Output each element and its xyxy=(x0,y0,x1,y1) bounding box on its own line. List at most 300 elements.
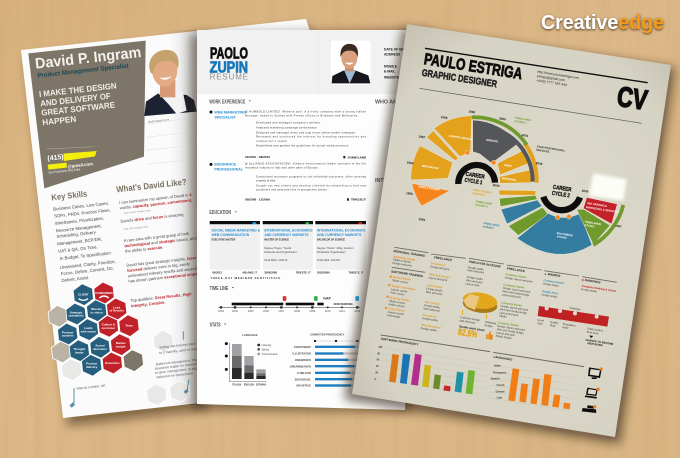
callout labels: PRINT DESIGN xyxy=(473,188,492,195)
closing note with arrow: Rank number xyxy=(587,326,604,333)
donut chart: career cycle 1: BRANDING xyxy=(502,176,517,182)
bar chart: languages: LANGUAGES xyxy=(493,355,513,362)
contact details with yellow highlights: @gmail.com xyxy=(67,161,93,169)
hexagon skills chart: leader xyxy=(75,350,85,354)
column: freelance: Company Studio xyxy=(503,282,525,290)
name heading: David P. Ingram xyxy=(34,44,142,73)
location note, bottom left xyxy=(69,383,107,408)
bar chart: software proficiency: 60 xyxy=(377,360,380,362)
donut chart: career cycle 2: CYCLE 2 xyxy=(551,191,570,199)
portrait photo xyxy=(331,41,371,85)
bar chart: languages: Portuguese xyxy=(493,371,507,374)
quote snippets, upper: Jane Doe, Design Lead xyxy=(123,226,148,231)
bar chart: languages: Spanish xyxy=(491,378,500,380)
hexagon skills chart: Product xyxy=(86,362,97,366)
job entry: insurance professional: @ ALLIANCE ASSICURAZIONI. Alliance Assicurazioni leader operates in the life xyxy=(245,162,367,166)
hexagon skills chart: customer xyxy=(102,326,116,330)
notes, bottom right: Balanced management, PM xyxy=(156,358,197,366)
personal details: WEBSITE xyxy=(384,76,400,80)
job entry: web marketing specialist: Analyzed marketing campaign performance. xyxy=(256,125,318,129)
pie chart captions: Studio work share xyxy=(459,324,485,332)
quote snippets, lower: A rare area with a great grasp of both xyxy=(124,231,189,243)
timeline year labels xyxy=(406,109,622,229)
column: software training: Design Techniques xyxy=(392,284,417,291)
donut chart: career cycle 1: CAREER xyxy=(465,172,485,181)
education column bodies: 2006/2008 xyxy=(264,271,277,275)
stacked bar chart: language: Communication xyxy=(262,353,279,356)
heading: work experience: WORK EXPERIENCE xyxy=(209,99,246,105)
grey header band xyxy=(197,30,430,94)
job entry: web marketing specialist: WEB MARKETING xyxy=(214,111,246,115)
callout labels: FREELANCE xyxy=(476,199,493,206)
job entry: web marketing specialist: Developed and managed company's website. xyxy=(256,120,321,124)
column: freelance: Studio design xyxy=(496,334,513,340)
timeline year labels: 1999 xyxy=(468,109,476,114)
donut chart: career cycle 1: CYCLE 1 xyxy=(464,178,483,186)
bar chart: software proficiency: 0 xyxy=(375,379,377,381)
education column bodies: TRIESTE, IT xyxy=(296,271,311,275)
red ribbon timeline: Quality xyxy=(550,320,559,325)
timeline year labels: 2000 xyxy=(499,116,506,121)
pie chart xyxy=(462,290,498,315)
quote snippets, lower: David has great strategic insights, laser xyxy=(126,255,197,268)
column: freelance studio list: Illustration xyxy=(423,313,437,319)
education column bodies: AND CURRENCY MARKETS xyxy=(264,233,309,237)
horizontal bar chart: computer proficiency xyxy=(290,333,358,388)
column: employee in-house: Design studio xyxy=(468,265,485,272)
contact details with yellow highlights xyxy=(47,147,97,175)
timeline chart: GAP xyxy=(323,297,331,301)
education column bodies: Degree Thesis: "eBay, Amazon xyxy=(317,246,354,250)
notes, bottom right: Selling into Internet sites xyxy=(159,342,196,350)
column: freelance: Web and media design xyxy=(497,327,524,335)
column: awards: Design Prize xyxy=(542,289,559,296)
job entry: web marketing specialist: competitor's reach. xyxy=(256,139,288,143)
hexagon skills chart: with vision xyxy=(80,329,96,333)
bar chart: software proficiency: SOFTWARE PROFICIENCY xyxy=(381,337,419,346)
column: software training: SOFTWARE TRAINING xyxy=(391,269,424,278)
job entry: web marketing specialist xyxy=(209,109,367,159)
column: freelance: Design, layout and print xyxy=(505,275,533,284)
key skills list, lower: UAT & QA, On Time, xyxy=(58,244,98,254)
personal details: ADDRESS xyxy=(384,53,401,57)
notes, bottom right: balanced on assessment xyxy=(156,371,193,379)
profile lines next to the photo: david.ingram.com xyxy=(148,117,170,124)
education column bodies: MASTER OF SCIENCE xyxy=(264,238,289,241)
quote snippets, upper: words: capacity, passion, commitment, xyxy=(120,197,192,210)
horizontal bar chart: computer proficiency: PHOTOSHOP xyxy=(294,345,311,349)
icon: tablet device xyxy=(582,405,596,413)
stacked bar chart: language: GERMAN xyxy=(256,384,266,387)
notes, bottom right xyxy=(155,331,203,394)
column: awards: Design studio xyxy=(543,281,560,288)
timeline chart: NOW WORKING xyxy=(334,302,353,306)
column: personal training: Design and print xyxy=(392,261,412,268)
column: freelance: Design, layout and print xyxy=(500,304,529,312)
red ribbon timeline: Reputation xyxy=(563,322,576,328)
column: freelance: Company Studio xyxy=(505,272,527,279)
donut chart: career cycle 2 xyxy=(499,185,623,254)
job title: GRAPHIC DESIGNER xyxy=(421,68,498,90)
timeline chart: 2004 xyxy=(232,309,238,313)
job entry: web marketing specialist: @ HUMBOLD LIMITED. Website.split is a lively company with a strong Italian xyxy=(245,109,367,113)
bar chart: software proficiency xyxy=(375,335,490,395)
stacked bar chart: language: ITALIAN xyxy=(232,384,241,387)
name heading xyxy=(210,45,248,81)
timeline year labels: 2001 xyxy=(522,133,529,138)
column: freelance xyxy=(496,266,533,340)
panel: middle resume Paolo Zupin xyxy=(190,30,430,412)
donut chart: career cycle 2: FREELANCE xyxy=(585,220,602,226)
personal details: MOBILE xyxy=(384,64,398,68)
horizontal bar chart: computer proficiency: DREAMWEAVER xyxy=(290,364,311,368)
column: freelance: Studio xyxy=(499,314,507,319)
column: freelance: Web and media design xyxy=(500,307,528,315)
stacked bar chart: language xyxy=(225,333,279,387)
job entry: insurance professional: INSURANCE xyxy=(214,163,237,167)
timeline year labels: 2007 xyxy=(615,224,622,229)
column: freelance: FREELANCE xyxy=(507,266,525,273)
column: software training: Color Theory xyxy=(388,306,406,313)
icon: laptop xyxy=(585,388,600,399)
column: freelance studio list: Design studio xyxy=(424,303,441,310)
glossy paper glare xyxy=(589,173,627,201)
bar chart: software proficiency: 20 xyxy=(375,373,379,375)
key skills list, lower xyxy=(56,230,116,283)
horizontal bar chart: computer proficiency: MS OFFICE xyxy=(297,384,311,388)
column: employee in-house: EMPLOYEE IN-HOUSE xyxy=(469,260,501,269)
heading: who am I: WHO AM I xyxy=(375,99,401,105)
contact details with yellow highlights: San Francisco Bay Area xyxy=(48,167,81,175)
donut chart: career cycle 1: MOBILE DESIGN xyxy=(418,184,440,192)
job entry: insurance professional: 09/2008 - 12/2009 xyxy=(245,197,270,201)
column: software training: Print studio xyxy=(387,313,401,319)
column: freelance studio list: Design studio xyxy=(426,286,443,293)
education column bodies: Worldwide Organization" xyxy=(317,250,346,254)
closing note with arrow: CHANCE TO BECOME xyxy=(585,338,614,346)
column: freelance studio list: Web and print xyxy=(423,306,440,313)
column: rankings: Design studio xyxy=(581,287,598,294)
faint background hexagons xyxy=(61,329,191,407)
personal details: E-MAIL xyxy=(384,70,395,74)
key skills list, upper: SOPs, PRDs, Process Flows, xyxy=(54,207,111,219)
donut chart: career cycle 2: BIG GRAPHICS xyxy=(587,201,607,208)
pie chart captions xyxy=(459,310,497,332)
timeline chart: 2006 xyxy=(263,309,269,313)
timeline year labels: 1998 xyxy=(441,115,448,120)
column: freelance studio list: Company A xyxy=(431,261,446,267)
hexagon skills chart: decisions xyxy=(93,347,107,351)
column: freelance studio list: Layout and print xyxy=(428,275,448,282)
hexagon skills chart: of Results xyxy=(109,309,124,313)
portrait photo xyxy=(144,50,197,116)
timeline chart: 2007 xyxy=(278,309,285,313)
statement: AND DELIVERY OF xyxy=(40,91,111,108)
callout labels: STAR PROFESSIONAL xyxy=(537,144,566,153)
bar chart: software proficiency: 80 xyxy=(377,354,381,356)
hexagon skills chart: CONSUMER xyxy=(95,291,114,295)
donut chart: career cycle 2: MARKETING & SERVICES xyxy=(586,205,619,214)
callout labels: SERVICES xyxy=(536,148,550,154)
education column bodies: WEB COMMUNICATION xyxy=(212,233,250,237)
column: freelance studio list: Design studio xyxy=(421,326,438,333)
hexagon skills chart: Culture & xyxy=(102,323,116,327)
contact text xyxy=(536,70,579,87)
column: awards: Company Award xyxy=(543,278,565,285)
location note, bottom left: Start at London, UK xyxy=(76,383,107,391)
horizontal bar chart: computer proficiency: HTML/CSS xyxy=(297,371,311,375)
heading: what's David like: What's David Like? xyxy=(116,177,187,194)
personal details xyxy=(384,47,410,80)
donut chart: career cycle 1: GRAPHIC DESIGN xyxy=(449,134,472,141)
column: software training: Studio course xyxy=(389,299,406,305)
timeline year labels: 1995 xyxy=(406,191,413,196)
callout labels xyxy=(472,116,566,230)
stacked bar chart: language: ENGLISH xyxy=(244,385,254,387)
column: personal training: Studio in Berlin xyxy=(393,257,412,264)
column: freelance studio list: Print Design xyxy=(427,283,443,289)
hexagon skills chart: Product xyxy=(62,330,73,334)
column: freelance studio list: Web Design xyxy=(425,300,440,306)
timeline chart: 2010 xyxy=(325,309,331,313)
pie chart captions: design xyxy=(485,323,493,328)
quote snippets, upper xyxy=(119,192,193,231)
key skills list, lower: Deliver, Assist xyxy=(61,275,89,283)
column: rankings xyxy=(581,278,617,294)
column: freelance studio list: Design and print xyxy=(430,264,450,271)
donut chart: career cycle 2: STUDIO xyxy=(584,223,595,229)
donut chart: career cycle 1: WEB DESIGN xyxy=(422,164,439,170)
callout labels: FREELANCE xyxy=(515,116,532,122)
hexagon skills chart: Execution xyxy=(105,361,120,365)
column: software training: Drawing Design xyxy=(390,295,410,302)
quote snippets, lower: Integrity, Creative. xyxy=(131,300,166,308)
education column bodies: INTERNATIONAL ECONOMICS xyxy=(317,228,366,232)
column: software training: Print course xyxy=(390,290,405,297)
hexagon skills chart: Sound xyxy=(95,344,105,348)
statement: GREAT SOFTWARE xyxy=(41,100,116,118)
job entry: insurance professional xyxy=(209,162,367,202)
key skills list, lower: In Budget, To Specification xyxy=(60,250,112,261)
donut chart: career cycle 2: MULTIMEDIA xyxy=(557,231,573,238)
bar chart: languages: French xyxy=(497,385,505,387)
education column bodies: SOCIAL MEDIA MARKETING & xyxy=(212,228,261,232)
quote snippets, upper: John Smith, Product Lead xyxy=(124,209,151,215)
logo: Creativeedge: Creativeedge xyxy=(541,11,664,34)
stacked bar chart: language: LANGUAGE xyxy=(242,333,258,337)
column: freelance studio list: Design studio xyxy=(422,316,439,323)
column: awards xyxy=(541,272,565,299)
name heading: ZUPIN xyxy=(210,59,248,76)
hexagon skills chart: insight xyxy=(116,344,126,348)
icon: desktop monitor xyxy=(588,367,603,379)
red ribbon timeline: Start xyxy=(537,321,543,326)
quote snippets, upper: David's drive and focus is amazing xyxy=(120,212,184,224)
column: freelance: Design, layout and print xyxy=(503,286,531,294)
column: freelance studio list: Web Site Design xyxy=(429,272,450,279)
notes, bottom right: to 2 majority, used to manage xyxy=(159,346,203,355)
education column bodies: MILANO, IT xyxy=(243,271,257,275)
education column bodies xyxy=(210,224,366,280)
column: personal training xyxy=(392,249,426,268)
contact text: http://www.pauloestriga.com xyxy=(537,70,579,80)
panel: right resume Paulo Estriga xyxy=(344,24,675,444)
column: freelance studio list: Web and print xyxy=(426,290,443,296)
bar chart: languages xyxy=(488,352,584,411)
column: awards: AWARDS xyxy=(547,272,561,278)
hexagon skills chart: Leads xyxy=(84,326,93,330)
header rules xyxy=(419,48,648,123)
quote snippets, lower: technological and strategic issues, and xyxy=(124,235,197,248)
bar chart: languages: Latin xyxy=(497,397,503,400)
column: freelance: Web and media design xyxy=(502,289,530,297)
education column bodies: Degree Thesis: "Social xyxy=(264,246,292,250)
column: employee in-house: Layout work xyxy=(465,281,481,288)
donut chart: career cycle 1: WEBSITE xyxy=(486,138,499,144)
column: freelance: Company Studio xyxy=(498,320,519,328)
column: personal training: Marketing Design xyxy=(393,254,416,262)
column: freelance: Company Studio xyxy=(501,300,523,308)
column: freelance: Layout and print xyxy=(496,330,516,337)
timeline chart: 2008 xyxy=(294,309,300,313)
heading: time line: TIME LINE xyxy=(210,286,229,292)
column: software training: Layout course xyxy=(391,287,408,294)
timeline year labels: 2008 xyxy=(582,189,589,194)
bar chart: languages: Italian xyxy=(494,365,501,368)
closing note with arrow: Best work xyxy=(587,330,599,336)
key skills list, upper xyxy=(53,201,111,233)
name heading: RESUME xyxy=(210,72,248,81)
icon: thumbs up xyxy=(486,331,493,340)
pie chart captions: Individual xyxy=(485,320,497,325)
hexagon skills chart: Mission xyxy=(91,307,102,311)
donut chart: career cycle 2: STUDIO xyxy=(557,234,567,240)
hexagon skills chart: systems xyxy=(62,334,74,338)
quote snippets, lower: the ability to execute. xyxy=(125,244,164,254)
timeline chart xyxy=(218,296,361,313)
heading: stats: STATS xyxy=(210,323,221,329)
job entry: web marketing specialist: Heritage, based in Sydney with French offices in Brisbane and Melbourne. xyxy=(245,114,359,118)
education column bodies: Networks and Organization" xyxy=(264,250,297,254)
key skills list, lower: Management, BCP/DR, xyxy=(57,236,102,246)
contact text: +44(0) 7777 555 444 xyxy=(536,78,567,87)
column: software training: Adobe Design xyxy=(393,275,411,281)
donut chart: career cycle 1 xyxy=(411,116,537,206)
callout labels: AGENCY xyxy=(483,224,495,230)
job entry: web marketing specialist: Designed and managed direct and long terms online market strategies. xyxy=(256,130,356,134)
column: awards: Design studio xyxy=(541,292,558,299)
olive header block xyxy=(28,41,146,188)
job entry: insurance professional: PROFESSIONAL xyxy=(214,167,244,171)
job entry: web marketing specialist: SPECIALIST xyxy=(214,115,237,119)
timeline year labels: 1994 xyxy=(418,217,426,222)
timeline chart: 2011 xyxy=(339,309,345,313)
CV mark: CV xyxy=(615,81,650,116)
panel: left resume David P. Ingram xyxy=(21,19,310,426)
hexagon skills chart: operations xyxy=(68,314,84,318)
job entry: insurance professional: Sought out new clients and develop clientele by networking to find new xyxy=(256,183,366,187)
hexagon skills chart xyxy=(48,281,144,377)
donut chart: career cycle 2: CAREER xyxy=(552,185,572,193)
hexagon skills chart: CLIENT xyxy=(78,293,89,297)
timeline year labels: 1996 xyxy=(407,160,414,165)
timeline chart: 2005 xyxy=(248,309,254,313)
education column bodies: BACHELOR OF SCIENCE xyxy=(317,238,346,241)
red ribbon timeline xyxy=(537,306,609,330)
education column bodies: EXECUTIVE MASTER xyxy=(212,238,236,241)
education column bodies: 2003/2006 xyxy=(317,271,330,275)
timeline year labels: 1997 xyxy=(418,134,426,139)
job entry: web marketing specialist: 01/2010 - 08/2012 xyxy=(245,155,270,159)
closing note with arrow: NEW WORK xyxy=(587,341,603,347)
name heading: PAOLO xyxy=(210,45,248,62)
column: employee in-house: Design studio xyxy=(467,275,484,281)
callout labels: FREELANCE xyxy=(483,221,500,228)
key skills list, lower: Unassisted, Clarity, Prioritize, xyxy=(60,259,116,270)
job entry: web marketing specialist: Established and applied the guidelines for social media presence. xyxy=(256,144,350,148)
red ribbon timeline: Good xyxy=(537,318,545,323)
heading: key skills: Key Skills xyxy=(51,188,88,202)
job entry: insurance professional: a variety of risks. xyxy=(256,179,276,183)
callout labels: COMPANY xyxy=(472,191,486,197)
statement xyxy=(38,80,117,127)
job entry: insurance professional: Customized insurance programs to suit individual customers, often covering xyxy=(256,174,367,178)
bar chart: software proficiency: 100 xyxy=(378,347,383,349)
hexagon skills chart: delivery xyxy=(86,365,98,369)
key skills list, lower: Scheduling, Delivery xyxy=(56,230,97,239)
quote snippets, upper: I can summarize my opinion of David in 4 xyxy=(119,192,193,205)
horizontal bar chart: computer proficiency: SEO/SOCIAL xyxy=(295,377,311,381)
timeline year labels: 2002 xyxy=(536,161,543,166)
job title: Product Management Specialist xyxy=(37,63,130,80)
timeline chart: 2012 xyxy=(354,309,361,313)
horizontal bar chart: computer proficiency: ILLUSTRATOR xyxy=(292,352,311,356)
key skills list, upper: Wireframes, Prioritization, xyxy=(55,216,104,226)
key skills list, lower: Focus, Define, Commit, Do, xyxy=(61,266,114,276)
quote snippets, lower: focused delivery even in big, easily xyxy=(127,261,190,273)
timeline chart: 2009 xyxy=(309,309,316,313)
section rules xyxy=(392,247,617,282)
column: freelance studio list: Web Illustration xyxy=(421,323,442,330)
hexagon skills chart: Lead xyxy=(113,305,120,309)
donut chart: career cycle 1: PRINT xyxy=(504,163,513,168)
column: software training: Online school xyxy=(388,302,405,309)
red ribbon timeline: Rankings xyxy=(569,306,581,311)
quote snippets, lower: Top qualities: Great Results, High xyxy=(130,291,192,303)
quote snippets, lower: has shown partners exceptional empathy xyxy=(128,270,204,284)
column: employee in-house: Web and print xyxy=(466,278,483,285)
education column bodies: Final Mark: 110/110 xyxy=(317,258,341,262)
column: employee in-house xyxy=(465,260,501,288)
hexagon skills chart: Team xyxy=(125,324,133,328)
heading: interests: INTE xyxy=(375,178,388,184)
column: employee in-house: Web and print xyxy=(467,268,484,275)
key skills list, upper: Business Cases, Low Cases, xyxy=(53,201,109,212)
name heading: PAULO ESTRIGA xyxy=(423,51,524,83)
bar chart: software proficiency: 40 xyxy=(376,365,379,368)
job entry: insurance professional: customers and generate lists of prospective clients. xyxy=(256,188,328,192)
heading: education: EDUCATION xyxy=(209,210,231,216)
callout labels: STUDIO 1 xyxy=(514,119,527,125)
callout labels: STUDIO 2 xyxy=(475,203,488,209)
column: freelance: Layout and print xyxy=(499,310,519,317)
education column bodies: THREE-DAY WEBINAR CERTIFICATE xyxy=(210,276,281,280)
column: software training: Layout course xyxy=(388,310,405,316)
column: software training: Studio course xyxy=(392,278,409,285)
contact text: estriga@gmail.com xyxy=(537,74,566,82)
column: rankings: RANKINGS xyxy=(585,278,601,284)
notes, bottom right: to open management, to align xyxy=(155,366,199,375)
